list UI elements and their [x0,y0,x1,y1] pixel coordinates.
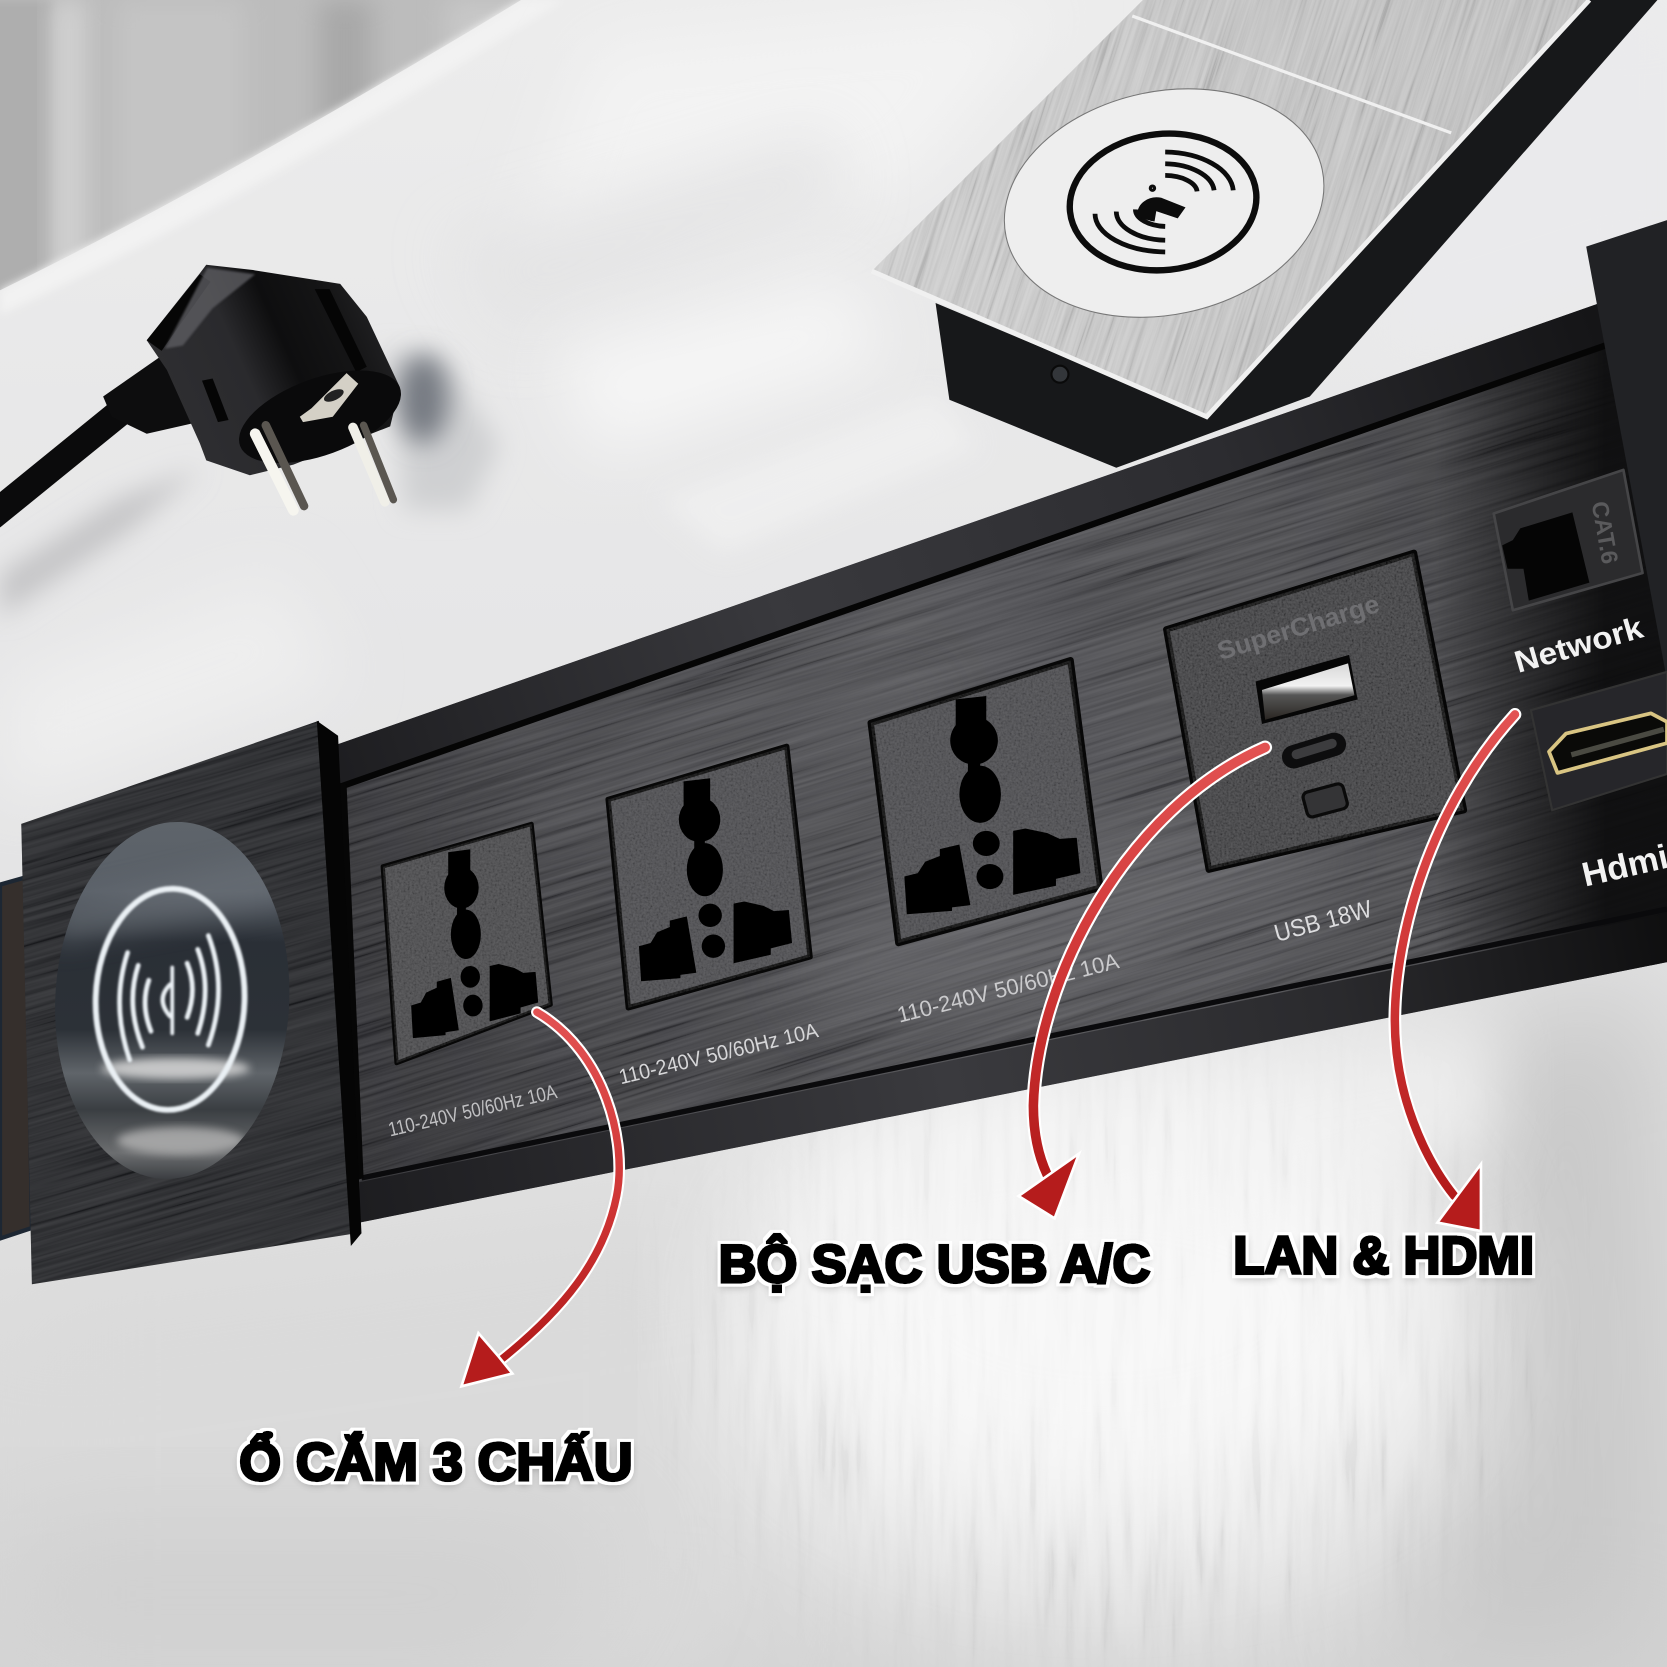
USB charger module [1159,548,1472,877]
label: USB charger: BỘ SẠC USB A/C [719,1233,1150,1294]
socket 3 [861,654,1106,952]
USB 18W label: USB 18W [1271,896,1375,948]
plug grip [147,274,211,351]
brushed silver top plate [874,0,1592,420]
strain relief [103,357,207,434]
icon: glowing wireless symbol [92,886,248,1112]
arrow: sockets [461,1012,619,1386]
socket rating labels [386,948,1121,1141]
USB-A port [1256,655,1358,724]
power plug with cable [0,265,500,617]
left wireless charging panel [21,720,362,1284]
arrow: USB charger [1018,747,1265,1218]
USB-C port [1279,730,1349,771]
charger black body [936,0,1657,468]
label: three-pin socket: Ổ CẮM 3 CHẤU [239,1431,633,1492]
strip top groove [340,346,1605,787]
RJ45 network port [1494,470,1643,610]
silver wireless charger module [874,0,1658,468]
plug front face [227,352,413,482]
label: LAN and HDMI: LAN & HDMI [1233,1227,1534,1286]
right black end panel [1586,220,1667,680]
CAT.6 mark: CAT.6 [1587,499,1623,566]
icon: wireless charging [1063,125,1263,279]
arrow: LAN and HDMI [1395,714,1515,1231]
rating label 1: 110-240V 50/60Hz 10A [386,1081,560,1141]
plug head [147,265,400,475]
end cap stub at left [0,877,32,1239]
socket 2 [595,744,819,1015]
glass lens [43,819,298,1182]
strip lower rail [361,909,1667,1178]
socket 1 [380,822,553,1066]
panel black edge [317,721,361,1246]
LED indicator [1302,783,1349,818]
Network label: Network [1510,609,1648,680]
blurred curtain backdrop [0,0,532,298]
HDMI port [1531,672,1667,810]
plug shadow [0,351,500,617]
panel face [21,720,350,1284]
plug pins [255,425,393,510]
rating label 3: 110-240V 50/60Hz 10A [895,948,1121,1028]
plug center contact [300,373,358,422]
white disc [983,60,1345,346]
SuperCharge brand text: SuperCharge [1214,590,1383,666]
main black power strip [338,304,1667,1222]
cable [0,402,133,517]
rating label 2: 110-240V 50/60Hz 10A [616,1018,821,1089]
screw on charger body [1051,366,1068,383]
strip left separator [334,781,364,1182]
